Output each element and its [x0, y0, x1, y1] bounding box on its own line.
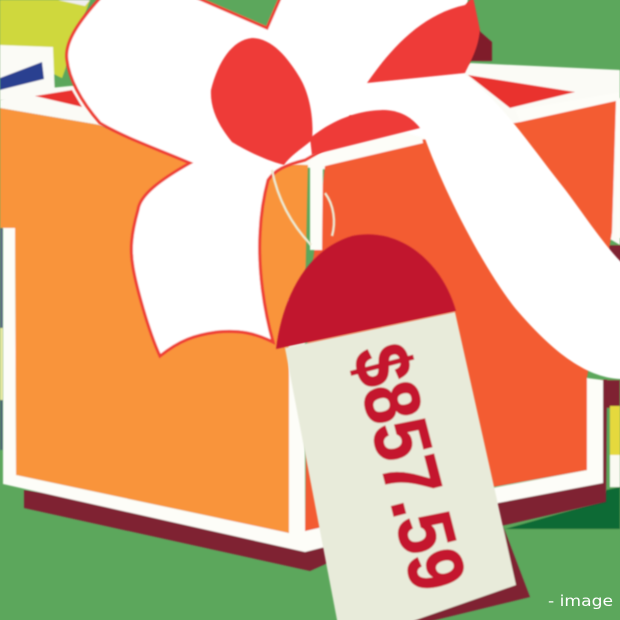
red bow lobes [211, 0, 480, 165]
box lid opening [0, 63, 620, 245]
tag body [285, 312, 516, 620]
green gap between ribbons [193, 0, 281, 28]
caption: - image [548, 592, 613, 610]
left lobe [211, 38, 312, 165]
lid inner red triangles [35, 90, 82, 107]
right face [305, 100, 616, 531]
dark lid corner [468, 28, 492, 61]
left and bottom white edges [3, 228, 603, 552]
upper bow fill [120, 0, 468, 160]
white lid bar [312, 128, 423, 166]
tag shadow [400, 510, 530, 620]
left face [0, 108, 308, 533]
right lobe [367, 0, 480, 83]
white ribbon and bow [67, 0, 620, 379]
bow loops [67, 0, 468, 356]
right ribbon [345, 75, 620, 379]
box shadow [24, 380, 607, 571]
middle lobe [310, 110, 420, 155]
tag red cap [276, 234, 456, 349]
price tag [276, 234, 530, 620]
price tag string [272, 170, 334, 245]
vertical corner strip [289, 340, 305, 533]
